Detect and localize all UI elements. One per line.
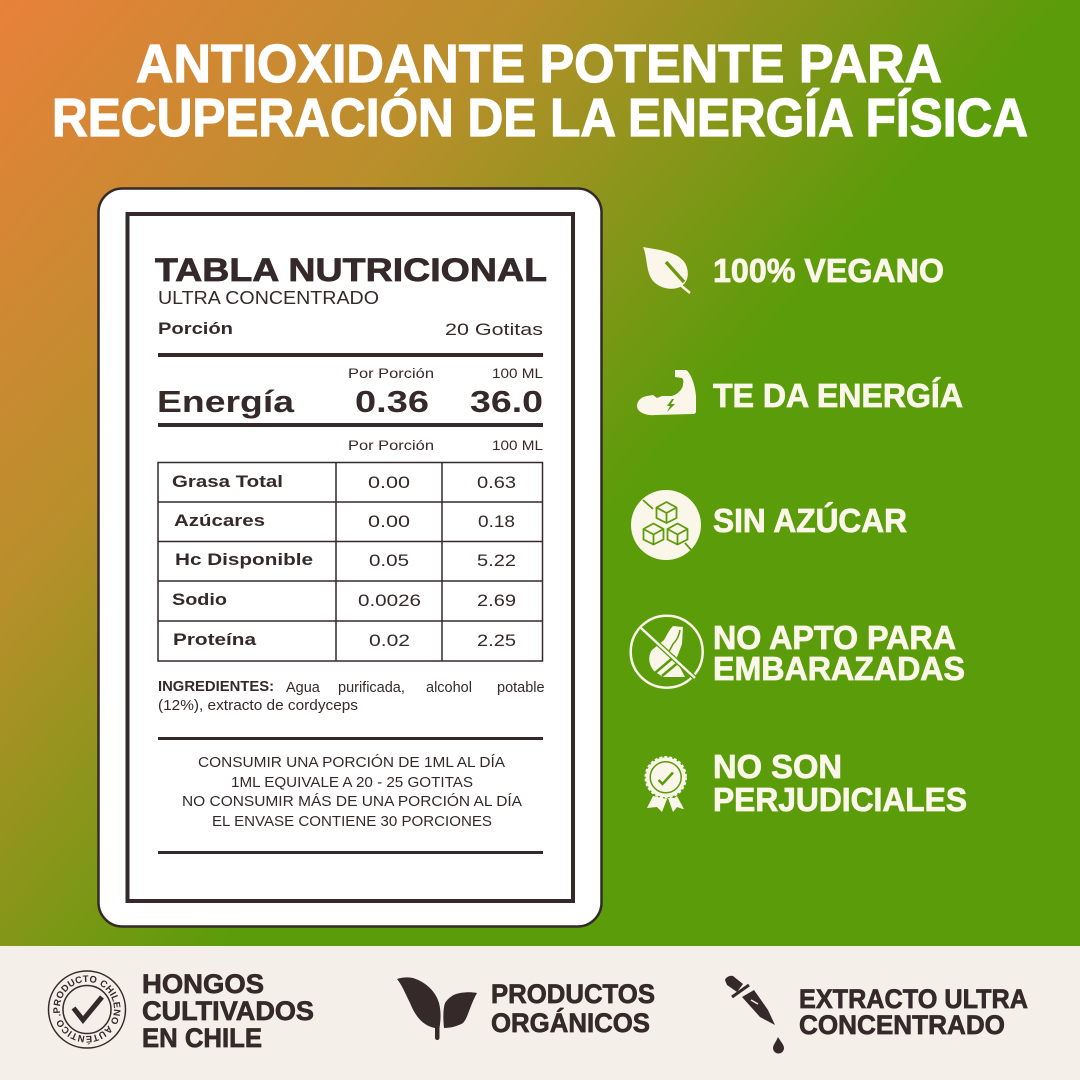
- label card: [98, 188, 602, 926]
- title: [52, 34, 1028, 148]
- ingredients: purificada,: [338, 680, 405, 696]
- row: proteina: 0.02: [369, 631, 410, 650]
- bottom band: [0, 946, 1080, 1080]
- table heading: TABLA NUTRICIONAL: [155, 252, 547, 288]
- ingredients: alcohol: [426, 680, 472, 696]
- row: proteina: Proteína: [173, 630, 257, 649]
- icon: badge: [645, 757, 686, 812]
- feature: productos organicos: ORGÁNICOS: [491, 1007, 650, 1038]
- nutrition table grid: [158, 462, 542, 661]
- benefit: vegano: [643, 247, 944, 293]
- energy row: Por Porción: [348, 366, 434, 381]
- icon: sprout: [397, 977, 477, 1040]
- benefit: vegano: 100% VEGANO: [713, 252, 944, 289]
- benefit: no apto embarazadas: NO APTO PARA: [713, 619, 956, 656]
- serving row: 20 Gotitas: [445, 320, 543, 339]
- row: azucares: 0.18: [478, 512, 515, 531]
- energy row: 0.36: [355, 384, 429, 419]
- ingredients: potable: [497, 680, 545, 696]
- row: grasa total: 0.00: [368, 473, 410, 492]
- benefit: sin azucar: [631, 490, 907, 560]
- row: azucares: Azúcares: [174, 511, 265, 530]
- usage instructions: CONSUMIR UNA PORCIÓN DE 1ML AL DÍA: [198, 754, 505, 771]
- title: ANTIOXIDANTE POTENTE PARA: [136, 34, 942, 94]
- benefit: no son perjudiciales: PERJUDICIALES: [713, 781, 967, 818]
- feature: extracto ultra concentrado: EXTRACTO ULTRA: [799, 984, 1028, 1014]
- feature: productos organicos: PRODUCTOS: [491, 979, 655, 1009]
- feature: extracto ultra concentrado: [725, 976, 1028, 1054]
- table heading: [155, 252, 547, 308]
- ingredients: (12%), extracto de cordyceps: [158, 698, 358, 714]
- row: hc disponible: 0.05: [369, 551, 409, 570]
- feature: productos organicos: [397, 977, 655, 1040]
- row: proteina: [173, 630, 516, 650]
- usage instructions: NO CONSUMIR MÁS DE UNA PORCIÓN AL DÍA: [182, 793, 522, 810]
- energy row: [157, 366, 544, 419]
- serving row: [158, 319, 543, 339]
- table column headers: 100 ML: [492, 438, 544, 453]
- benefit: energia: TE DA ENERGÍA: [713, 377, 963, 414]
- row: proteina: 2.25: [477, 631, 516, 650]
- row: azucares: 0.00: [368, 512, 410, 531]
- icon: no pregnancy: [631, 616, 703, 688]
- benefit: energia: [637, 370, 963, 415]
- usage instructions: 1ML EQUIVALE A 20 - 25 GOTITAS: [231, 774, 473, 791]
- benefit: no son perjudiciales: [645, 748, 967, 818]
- usage instructions: EL ENVASE CONTIENE 30 PORCIONES: [212, 813, 492, 830]
- feature: hongos cultivados en chile: CULTIVADOS: [142, 996, 314, 1026]
- icon: dropper: [725, 976, 784, 1054]
- ingredients: INGREDIENTES:: [158, 679, 274, 695]
- benefit: no son perjudiciales: NO SON: [713, 748, 842, 785]
- icon: no sugar cubes: [631, 490, 701, 560]
- energy row: Energía: [157, 384, 295, 419]
- ingredients: [158, 679, 545, 714]
- usage instructions: [182, 754, 522, 830]
- icon: flexed arm: [637, 370, 696, 415]
- icon: authentic seal: .PRODUCTO CHILENO AUTÉNTICO: [53, 975, 120, 1044]
- benefit: no apto embarazadas: EMBARAZADAS: [713, 650, 965, 687]
- benefit: sin azucar: SIN AZÚCAR: [713, 502, 907, 539]
- energy row: 36.0: [470, 384, 543, 419]
- icon: leaf: [643, 247, 690, 293]
- inner frame: [128, 214, 573, 901]
- table column headers: Por Porción: [348, 438, 434, 453]
- row: sodio: 2.69: [477, 591, 516, 610]
- serving row: Porción: [158, 319, 233, 338]
- table column headers: [348, 438, 544, 453]
- row: azucares: [174, 511, 515, 531]
- row: grasa total: Grasa Total: [172, 472, 283, 491]
- panel: nutrition table: [98, 188, 602, 926]
- feature: hongos cultivados en chile: [48, 969, 314, 1053]
- row: grasa total: [172, 472, 516, 492]
- row: sodio: Sodio: [172, 590, 227, 609]
- ingredients: Agua: [286, 680, 321, 696]
- feature: hongos cultivados en chile: HONGOS: [142, 969, 264, 999]
- row: hc disponible: [175, 550, 516, 570]
- table heading: ULTRA CONCENTRADO: [158, 288, 379, 308]
- row: hc disponible: Hc Disponible: [175, 550, 313, 569]
- row: hc disponible: 5.22: [477, 551, 516, 570]
- row: sodio: [172, 590, 516, 610]
- feature: extracto ultra concentrado: CONCENTRADO: [799, 1010, 1005, 1040]
- feature: hongos cultivados en chile: EN CHILE: [142, 1023, 262, 1053]
- row: grasa total: 0.63: [477, 473, 516, 492]
- row: sodio: 0.0026: [358, 591, 421, 610]
- benefit: no apto embarazadas: [631, 616, 965, 688]
- energy row: 100 ML: [492, 366, 544, 381]
